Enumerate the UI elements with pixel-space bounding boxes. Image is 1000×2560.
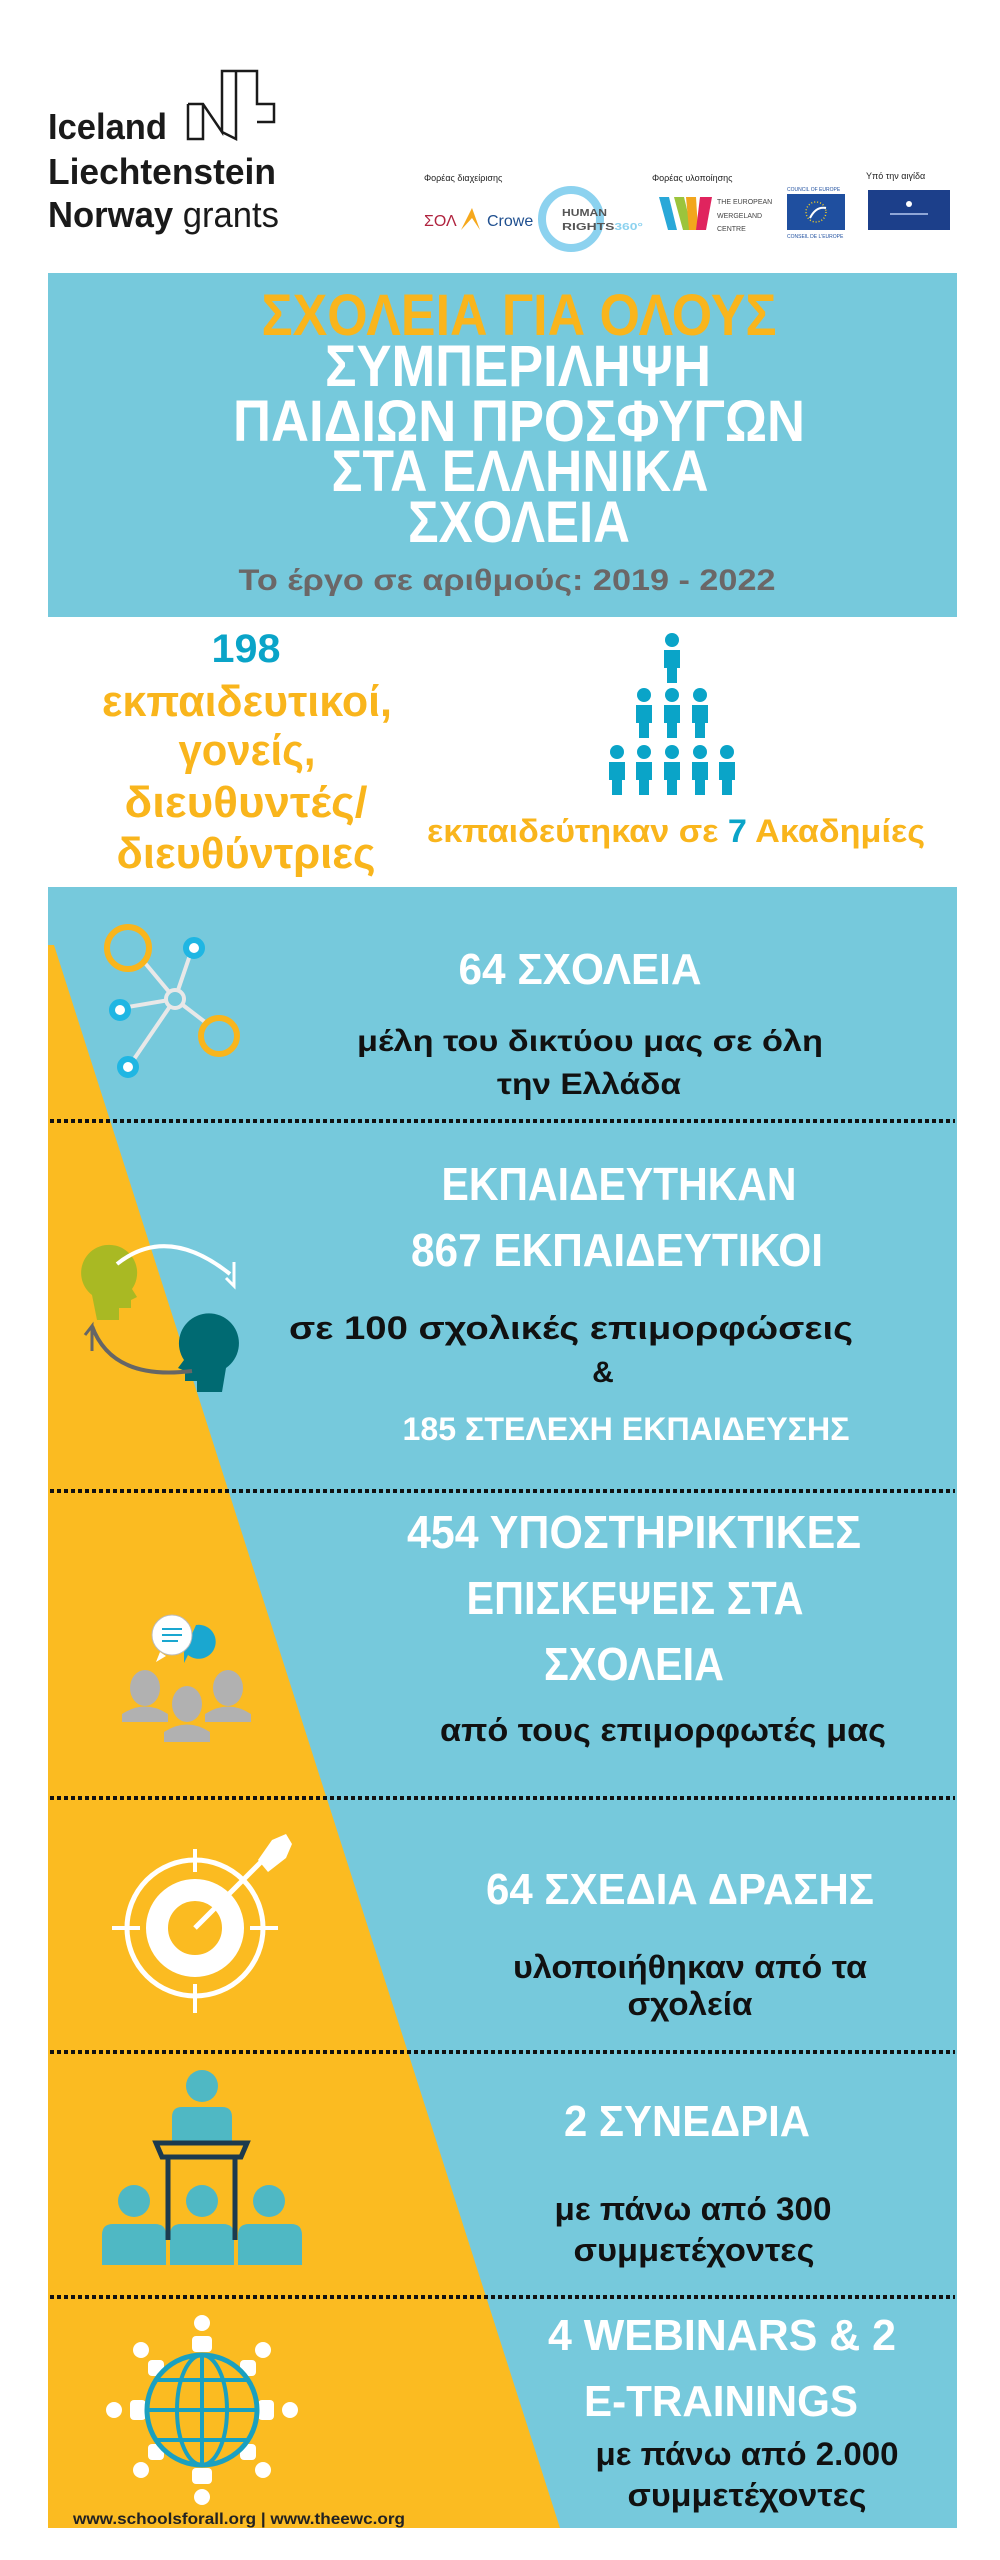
section: support visits: ΣΧΟΛΕΙΑ — [544, 1638, 724, 1690]
section: conferences — [554, 2097, 832, 2268]
partner logos: THE EUROPEAN — [717, 199, 772, 206]
section: conferences: με πάνω από 300 — [554, 2191, 832, 2227]
title: ΣΥΜΠΕΡΙΛΗΨΗ — [325, 334, 711, 399]
section: webinars: E-TRAININGS — [584, 2377, 858, 2426]
section: webinars: 4 WEBINARS & 2 — [548, 2311, 896, 2360]
icon: conference podium — [102, 2070, 302, 2265]
section: support visits: από τους επιμορφωτές μας — [440, 1712, 886, 1748]
partner logos — [424, 171, 950, 248]
logo: Iceland Liechtenstein Norway grants: Iceland — [48, 106, 167, 147]
stat: 198 participants: διευθυντές/ — [124, 778, 368, 827]
icon: group discussion — [122, 1615, 251, 1742]
icon: people pyramid — [609, 633, 735, 795]
partner logos: Crowe — [487, 213, 533, 230]
section: support visits: ΕΠΙΣΚΕΨΕΙΣ ΣΤΑ — [466, 1572, 804, 1624]
text: academies: εκπαιδεύτηκαν σε 7 Ακαδημίες — [427, 813, 925, 849]
logo: Iceland Liechtenstein Norway grants — [48, 71, 279, 235]
section: trained teachers: σε 100 σχολικές επιμορφώσεις — [289, 1310, 853, 1346]
partner logos: HUMAN — [562, 208, 607, 219]
stat: 198 participants: 198 — [212, 627, 280, 671]
subtitle: Το έργο σε αριθμούς: 2019 - 2022 — [238, 564, 776, 597]
title: ΣΧΟΛΕΙΑ — [408, 490, 630, 555]
icon: globe with people — [106, 2315, 298, 2505]
section: trained teachers: 185 ΣΤΕΛΕΧΗ ΕΚΠΑΙΔΕΥΣΗΣ — [402, 1411, 850, 1447]
partner logos: ΣΟΛ — [424, 213, 457, 230]
partner logos: WERGELAND — [717, 213, 762, 220]
section: 64 schools: 64 ΣΧΟΛΕΙΑ — [458, 945, 702, 994]
section: trained teachers — [289, 1158, 853, 1447]
stat: 198 participants: εκπαιδευτικοί, — [102, 677, 392, 726]
stat: 198 participants: διευθύντριες — [116, 829, 376, 878]
section: support visits — [407, 1506, 886, 1748]
section: trained teachers: 867 ΕΚΠΑΙΔΕΥΤΙΚΟΙ — [411, 1224, 823, 1276]
footer urls: www.schoolsforall.org | www.theewc.org — [72, 2511, 405, 2528]
section: action plans: σχολεία — [628, 1986, 753, 2022]
title panel — [48, 273, 957, 617]
partner logos: CENTRE — [717, 226, 746, 233]
partner logos: RIGHTS 360° — [562, 222, 643, 233]
section: action plans: 64 ΣΧΕΔΙΑ ΔΡΑΣΗΣ — [486, 1865, 874, 1914]
section: conferences: συμμετέχοντες — [574, 2232, 814, 2268]
partner logos: Φορέας διαχείρισης — [424, 173, 503, 183]
partner logos: Υπό την αιγίδα — [866, 171, 925, 181]
title — [233, 283, 805, 555]
title: ΣΧΟΛΕΙΑ ΓΙΑ ΟΛΟΥΣ — [262, 283, 776, 348]
logo: Iceland Liechtenstein Norway grants: Liechtenstein — [48, 151, 276, 192]
icon: heads exchange — [81, 1245, 239, 1392]
section: conferences: 2 ΣΥΝΕΔΡΙΑ — [564, 2097, 810, 2146]
main stats panel — [48, 887, 957, 2528]
logo: Iceland Liechtenstein Norway grants: Norway grants — [48, 194, 279, 235]
section: action plans: υλοποιήθηκαν από τα — [513, 1949, 867, 1985]
icon: target with arrow — [112, 1834, 292, 2013]
section: 64 schools: την Ελλάδα — [497, 1068, 682, 1101]
section: trained teachers: & — [592, 1356, 614, 1389]
partner logos: CONSEIL DE L'EUROPE — [787, 234, 844, 240]
icon: network — [107, 927, 237, 1075]
section: 64 schools: μέλη του δικτύου μας σε όλη — [357, 1025, 823, 1058]
section: trained teachers: ΕΚΠΑΙΔΕΥΤΗΚΑΝ — [442, 1158, 796, 1210]
stat: 198 participants — [102, 627, 392, 878]
section: support visits: 454 ΥΠΟΣΤΗΡΙΚΤΙΚΕΣ — [407, 1506, 861, 1558]
partner logos: COUNCIL OF EUROPE — [787, 187, 841, 193]
section: 64 schools — [357, 945, 823, 1101]
stat: 198 participants: γονείς, — [178, 726, 316, 775]
partner logos: Φορέας υλοποίησης — [652, 173, 733, 183]
section: webinars: με πάνω από 2.000 — [596, 2436, 898, 2472]
title: ΠΑΙΔΙΩΝ ΠΡΟΣΦΥΓΩΝ — [233, 389, 805, 454]
section: webinars: συμμετέχοντες — [628, 2477, 866, 2513]
section: action plans — [486, 1865, 874, 2022]
section: webinars — [548, 2311, 898, 2513]
title: ΣΤΑ ΕΛΛΗΝΙΚΑ — [332, 439, 708, 504]
